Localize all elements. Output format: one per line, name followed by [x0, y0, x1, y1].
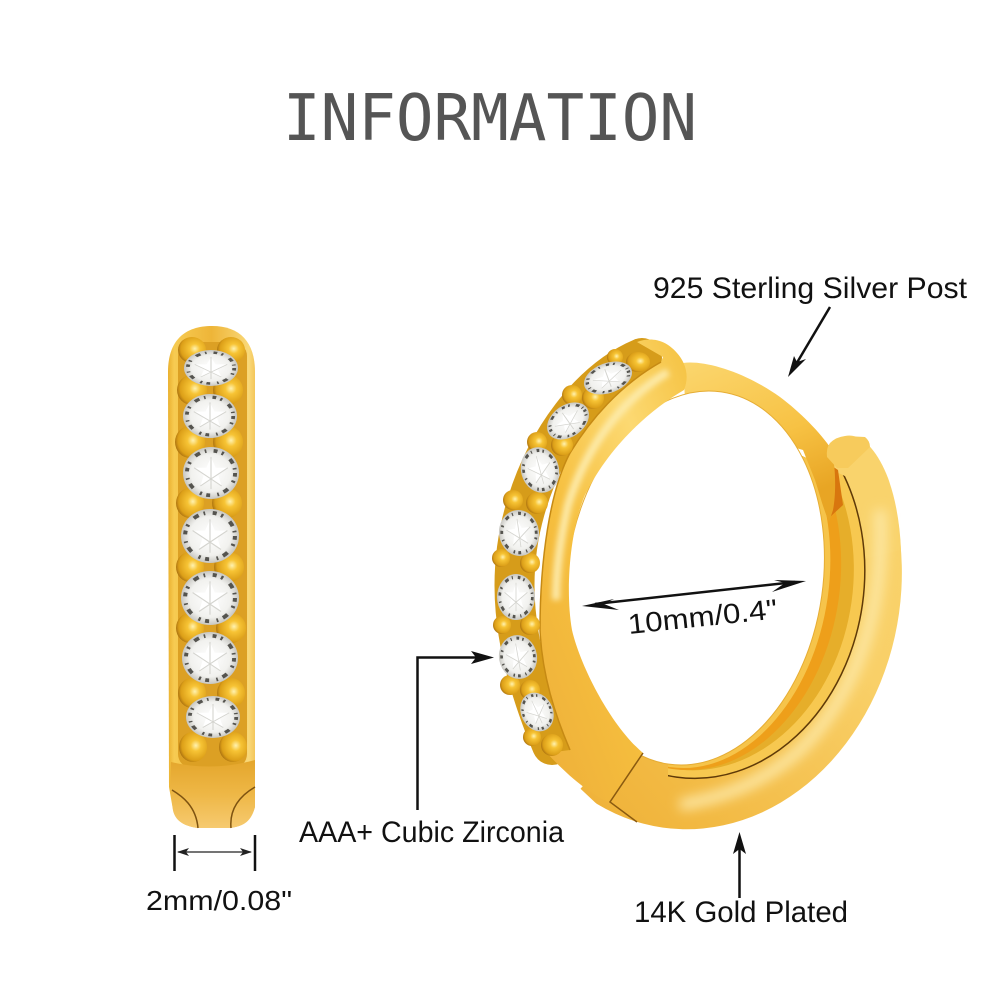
front face inner edge [540, 362, 661, 750]
title: INFORMATION [283, 82, 697, 156]
thin inner rim [668, 456, 830, 768]
arrow: plating [733, 832, 746, 898]
prongs [492, 349, 650, 756]
icon: earring side view [168, 326, 255, 828]
front face highlight [556, 372, 668, 600]
stones [181, 350, 240, 738]
inner channel [668, 456, 866, 780]
polished front face [540, 340, 687, 803]
label: zirconia: AAA+ Cubic Zirconia [299, 816, 564, 849]
prongs [175, 337, 247, 762]
hoop opening [542, 374, 848, 782]
yellow recess [688, 456, 854, 770]
label: plating: 14K Gold Plated [634, 896, 848, 929]
label: diameter: 10mm/0.4" [626, 593, 779, 640]
earring body [168, 326, 255, 828]
silver post [683, 363, 835, 522]
hinge seam [610, 753, 643, 822]
channel rim with dark edge line [668, 456, 866, 780]
polished lower end [170, 760, 255, 828]
back band outer [580, 546, 902, 830]
stone channel [514, 358, 642, 745]
label: width: 2mm/0.08" [146, 885, 292, 916]
arrow: post [788, 307, 830, 377]
orange recess [668, 456, 841, 770]
arrow: zirconia leader [418, 651, 494, 810]
highlight on lower band [680, 510, 881, 805]
stone channel [178, 342, 247, 768]
back band shoulder [830, 435, 901, 560]
width dimension marker [174, 835, 255, 871]
clasp lines [172, 787, 255, 828]
end cap [827, 436, 870, 468]
dark gap behind post [823, 460, 843, 517]
stones [495, 355, 637, 737]
icon: hoop earring angled view [492, 338, 902, 830]
label: post: 925 Sterling Silver Post [653, 272, 968, 305]
arrow: diameter [582, 580, 806, 610]
